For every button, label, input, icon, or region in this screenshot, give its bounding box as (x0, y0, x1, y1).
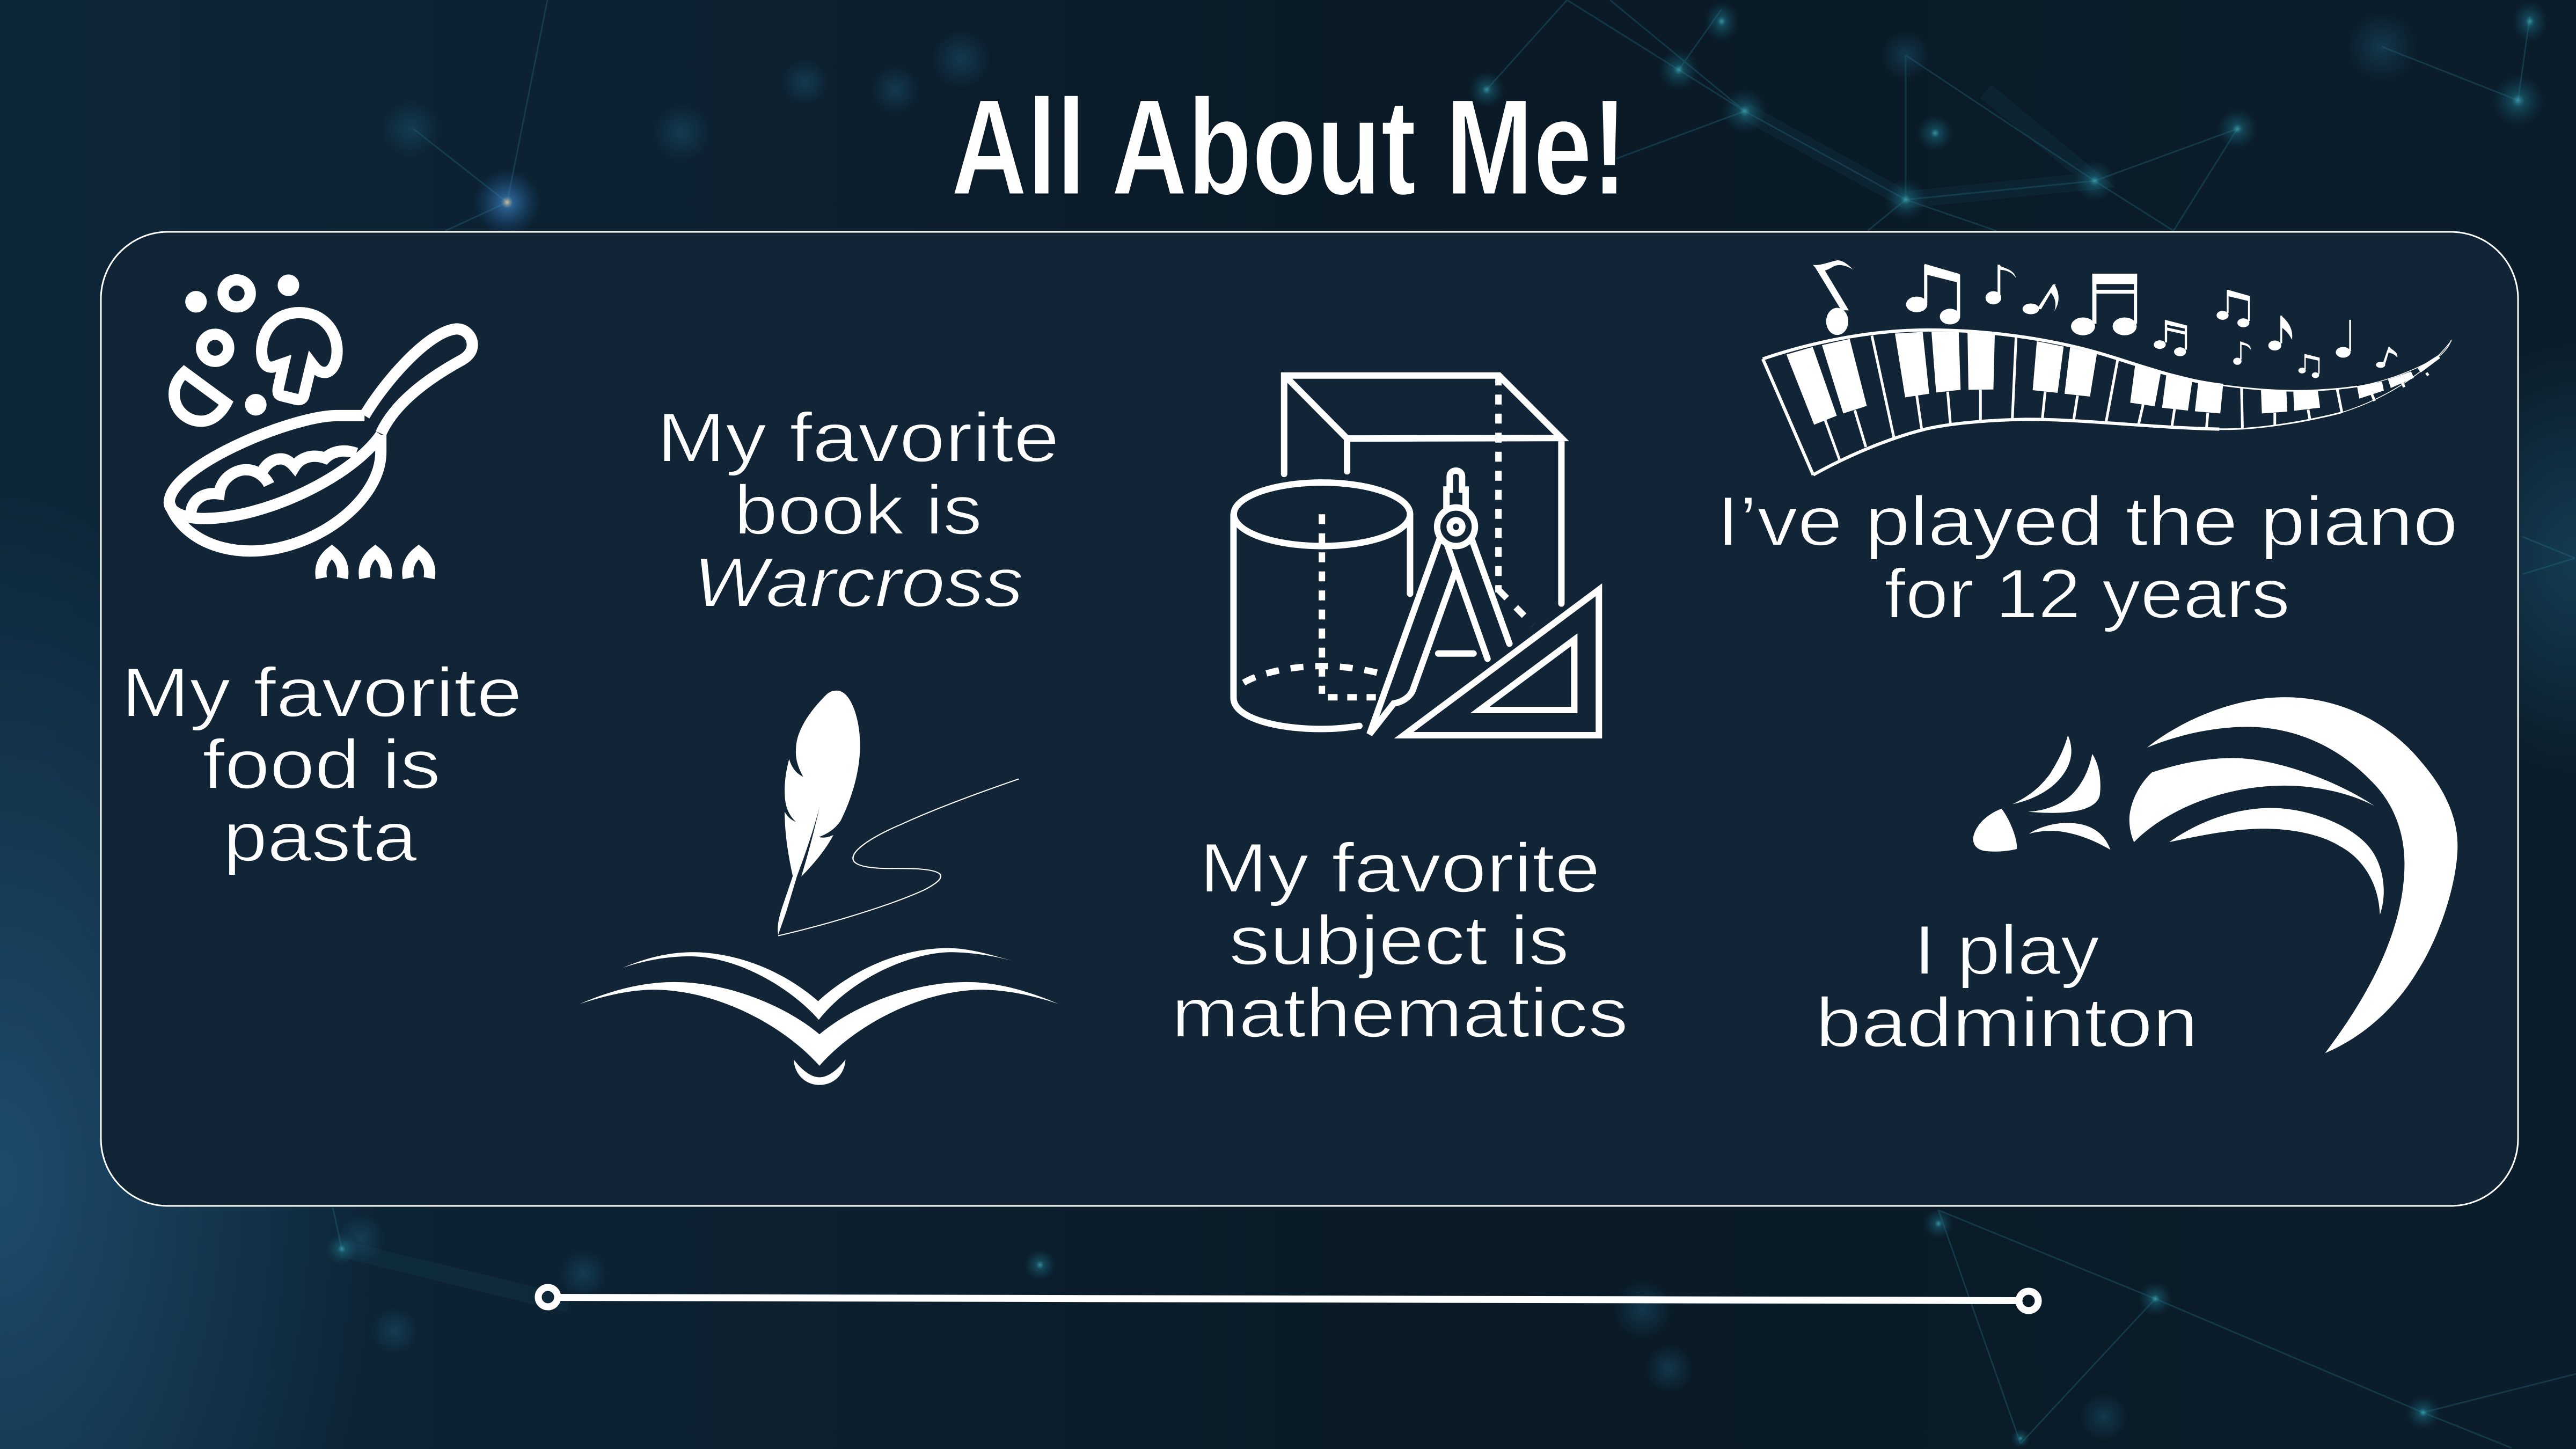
text: piano (1717, 482, 2458, 633)
text: favorite food: pasta (223, 797, 418, 876)
text: piano: for 12 years (1884, 554, 2290, 633)
text: favorite subject: mathematics (1172, 974, 1628, 1052)
title: All About Me! (951, 71, 1627, 224)
text: badminton: badminton (1816, 983, 2198, 1062)
text: favorite book: My favorite (657, 398, 1059, 477)
text: favorite subject: My favorite (1199, 829, 1600, 907)
icon: frying pan with food (169, 274, 472, 578)
text: piano: I’ve played the piano (1717, 482, 2458, 560)
icon: piano keyboard with music notes (1763, 260, 2451, 475)
panel: about me card (101, 232, 2518, 1206)
text: favorite subject (1172, 829, 1628, 1052)
icon: geometry shapes and compass (1233, 376, 1599, 735)
text: favorite book: book is (734, 471, 982, 549)
notes (1826, 308, 1848, 335)
text: badminton (1816, 911, 2198, 1062)
text: favorite food: My favorite (121, 653, 522, 731)
icon: quill and open book (580, 691, 1058, 1085)
text: favorite book (657, 398, 1059, 621)
text: favorite food: food is (202, 725, 441, 803)
text: badminton: I play (1914, 911, 2099, 989)
divider line with ring ends (538, 1287, 2038, 1311)
icon: badminton shuttlecock (1973, 697, 2457, 1053)
text: favorite subject: subject is (1229, 901, 1569, 979)
text: favorite book: Warcross (693, 543, 1023, 621)
text: favorite food (121, 653, 522, 876)
